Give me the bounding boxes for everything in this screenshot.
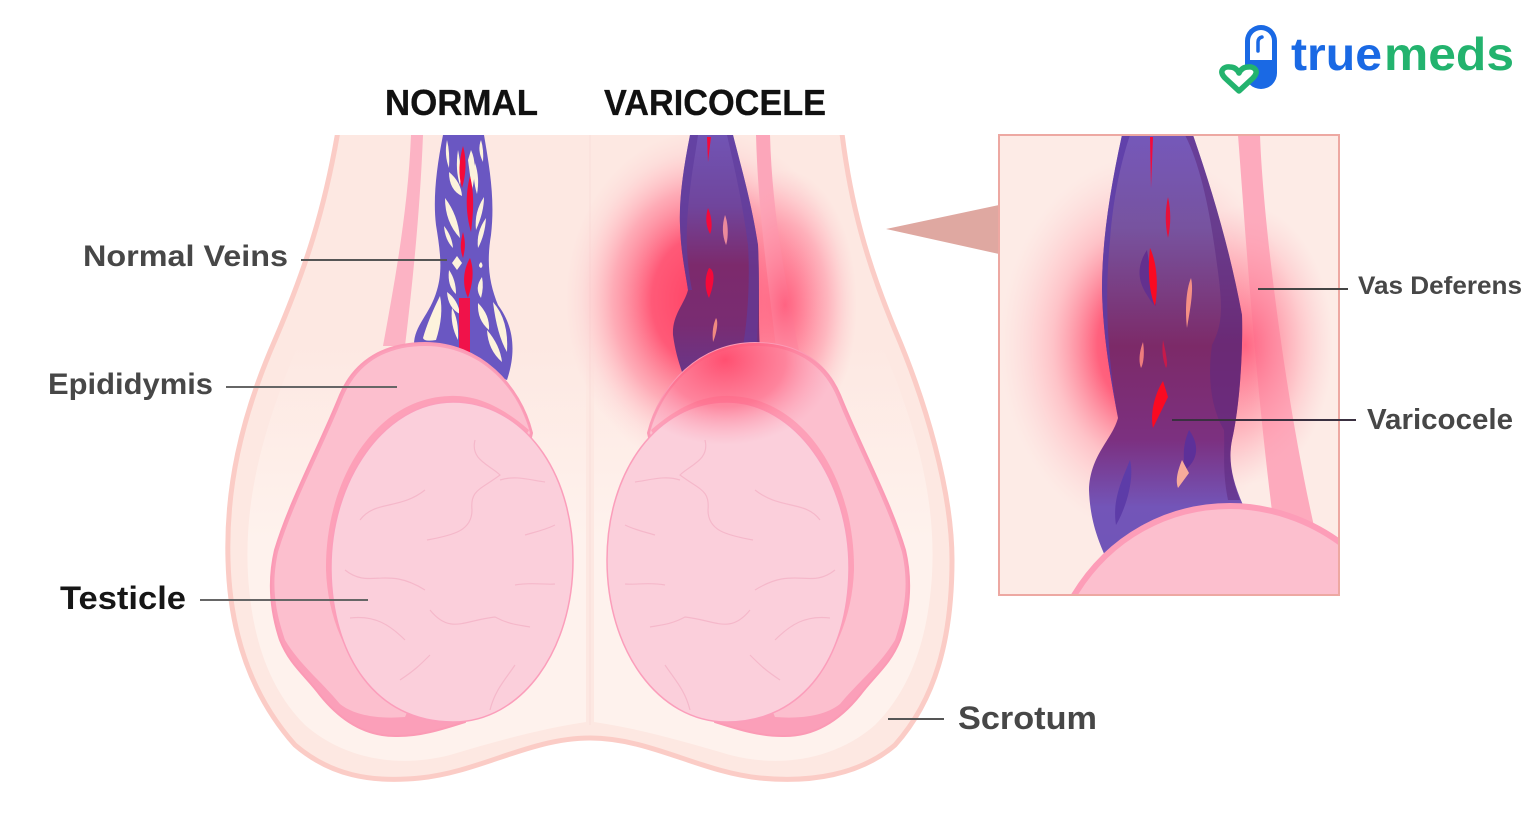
main anatomy diagram xyxy=(228,125,952,779)
heading: varicocele: VARICOCELE xyxy=(604,82,826,123)
label: vas deferens: Vas Deferens xyxy=(1358,272,1522,300)
label: epididymis: Epididymis xyxy=(48,368,213,401)
vein lattice silhouette xyxy=(414,135,513,380)
varicocele glow xyxy=(579,135,850,436)
label: scrotum: Scrotum xyxy=(958,700,1097,736)
left vas deferens xyxy=(383,135,423,346)
varicocele glow on epididymis xyxy=(656,343,822,438)
left testicle and epididymis xyxy=(271,343,573,736)
right testicle and epididymis xyxy=(607,343,909,736)
icon: capsule xyxy=(1245,25,1277,89)
logo word: true: true xyxy=(1291,28,1382,80)
label: varicocele: Varicocele xyxy=(1367,404,1513,436)
scrotum xyxy=(228,125,952,779)
inset vas deferens xyxy=(1238,135,1316,535)
icon: heart xyxy=(1222,67,1256,91)
artery xyxy=(459,146,473,352)
normal veins xyxy=(414,135,513,380)
varicocele veins xyxy=(673,135,760,372)
inset panel: varicocele close-up xyxy=(999,135,1342,597)
label: normal veins: Normal Veins xyxy=(83,240,288,273)
vein slits xyxy=(1115,137,1196,525)
logo: truemeds xyxy=(1222,25,1514,91)
inset enlarged vein xyxy=(1089,135,1243,558)
inset epididymis xyxy=(1073,506,1342,597)
pointer triangle xyxy=(886,205,999,254)
heading: normal: NORMAL xyxy=(385,82,538,123)
label: testicle: Testicle xyxy=(60,580,186,616)
right vas deferens xyxy=(756,135,800,356)
lattice openings xyxy=(423,140,507,362)
logo word: meds: meds xyxy=(1384,28,1514,80)
inset glow xyxy=(1017,184,1260,494)
